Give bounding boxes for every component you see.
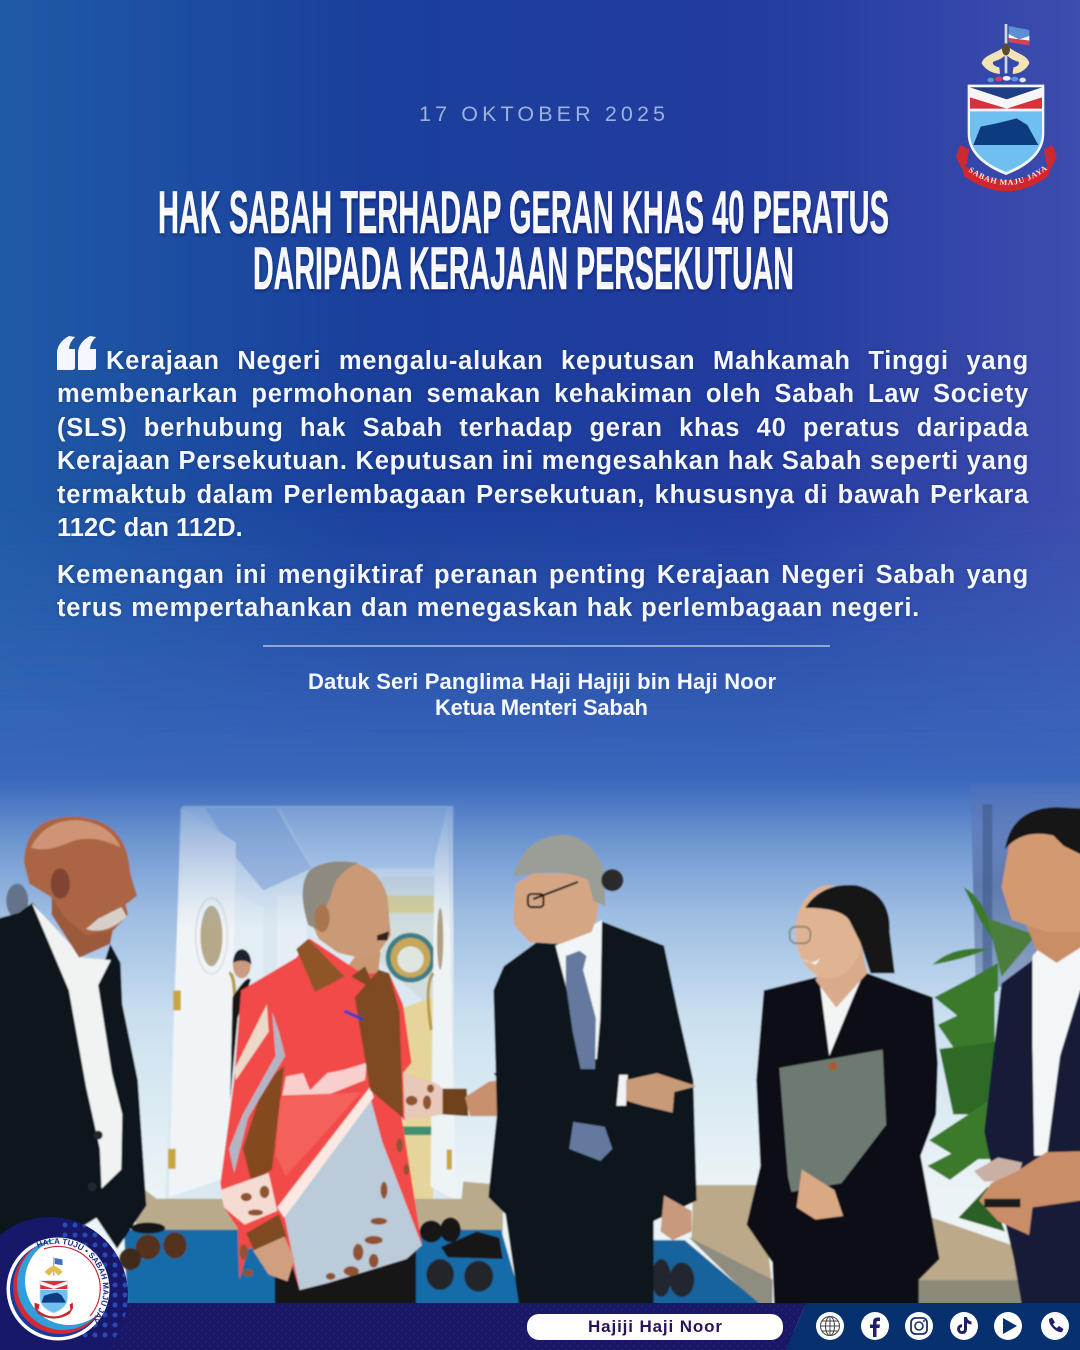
doorway top fade xyxy=(176,806,455,928)
person: right man xyxy=(974,807,1080,1307)
person: man with grey hair bun xyxy=(488,835,697,1307)
attribution xyxy=(308,669,776,720)
batik spots xyxy=(240,1084,434,1280)
divider xyxy=(263,645,830,647)
icon: quotation mark xyxy=(57,336,96,370)
footer right band xyxy=(786,1303,1080,1350)
title xyxy=(158,179,889,302)
doorway xyxy=(165,806,456,1200)
name pill xyxy=(527,1314,783,1340)
photo xyxy=(0,500,1080,1330)
icon: tiktok xyxy=(950,1312,978,1340)
person: woman with clipboard xyxy=(747,885,940,1307)
quote body text: (SLS) berhubung hak Sabah terhadap geran khas 40 peratus daripada xyxy=(57,414,1029,442)
quote body text: membenarkan permohonan semakan kehakiman oleh Sabah Law Society xyxy=(57,380,1029,408)
icon: instagram xyxy=(905,1312,933,1340)
person: Hajiji in red batik shirt xyxy=(220,861,523,1307)
quote body text: Kemenangan ini mengiktiraf peranan penting Kerajaan Negeri Sabah yang xyxy=(57,561,1029,589)
quote body text xyxy=(57,347,1029,622)
person: left man xyxy=(0,816,146,1249)
blue carpet xyxy=(124,1230,523,1307)
window behind right man xyxy=(970,784,1080,987)
icon: facebook xyxy=(861,1312,889,1340)
date: 17 OKTOBER 2025 xyxy=(419,102,665,126)
quote body text: 112C dan 112D. xyxy=(57,514,243,542)
bench xyxy=(523,1185,1022,1307)
name pill: Hajiji Haji Noor xyxy=(588,1317,722,1336)
icon: website xyxy=(816,1312,844,1340)
icon: phone xyxy=(1041,1312,1069,1340)
logo: Sabah crest xyxy=(956,24,1057,192)
logo: Sabah crest: SABAH MAJU JAYA xyxy=(968,166,1048,186)
logo badge: Hala Tuju xyxy=(0,1217,128,1350)
ribbon xyxy=(956,145,969,169)
granite floor xyxy=(136,1182,503,1233)
attribution: Ketua Menteri Sabah xyxy=(435,695,648,720)
quote body text: Kerajaan Persekutuan. Keputusan ini mengesahkan hak Sabah seperti yang xyxy=(57,447,1029,475)
shoes xyxy=(119,1217,503,1292)
photo wall xyxy=(0,500,1080,1330)
quote body text: terus mempertahankan dan menegaskan hak perlembagaan negeri. xyxy=(57,594,920,622)
footer left band xyxy=(0,1303,806,1350)
icon: youtube play xyxy=(994,1312,1022,1340)
quote body text: Kerajaan Negeri mengalu-alukan keputusan Mahkamah Tinggi yang xyxy=(106,347,1029,375)
attribution: Datuk Seri Panglima Haji Hajiji bin Haji Noor xyxy=(308,669,776,694)
plant xyxy=(927,887,1036,1231)
quote body text: termaktub dalam Perlembagaan Persekutuan, khususnya di bawah Perkara xyxy=(57,481,1029,509)
